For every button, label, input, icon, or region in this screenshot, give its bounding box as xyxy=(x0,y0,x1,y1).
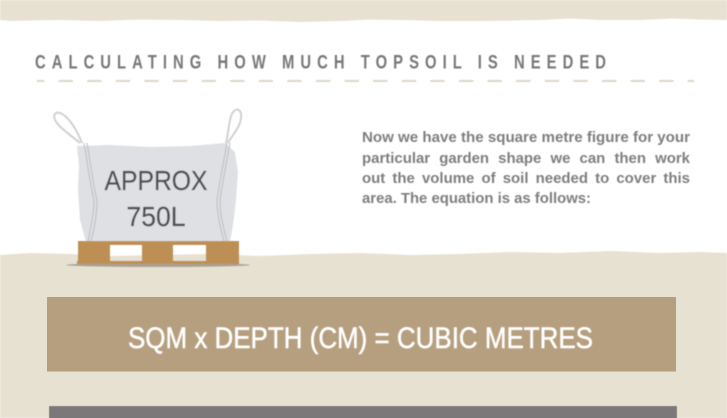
bag label: APPROX xyxy=(104,165,208,196)
bag label xyxy=(104,165,208,232)
heading: CALCULATING HOW MUCH TOPSOIL IS NEEDED xyxy=(35,52,606,73)
equation text: SQM x DEPTH (CM) = CUBIC METRES xyxy=(128,322,593,355)
bag label: 750L xyxy=(126,201,186,232)
body text: out the volume of soil needed to cover this xyxy=(362,170,690,187)
equation box xyxy=(47,297,676,372)
next panel: dark box xyxy=(49,406,677,418)
body text xyxy=(362,129,691,207)
icon: bulk bag on pallet xyxy=(54,110,250,267)
bag seams xyxy=(84,143,230,241)
bag handles xyxy=(54,110,241,143)
top torn band xyxy=(0,0,727,22)
pallet xyxy=(77,241,239,264)
body text: area. The equation is as follows: xyxy=(362,190,591,207)
pallet shadow xyxy=(66,263,250,267)
body text: particular garden shape we can then work xyxy=(362,150,691,167)
body text: Now we have the square metre figure for your xyxy=(362,129,690,146)
dashed divider xyxy=(37,80,694,82)
bottom cream background with torn edge xyxy=(0,251,727,418)
bag body xyxy=(77,143,238,242)
